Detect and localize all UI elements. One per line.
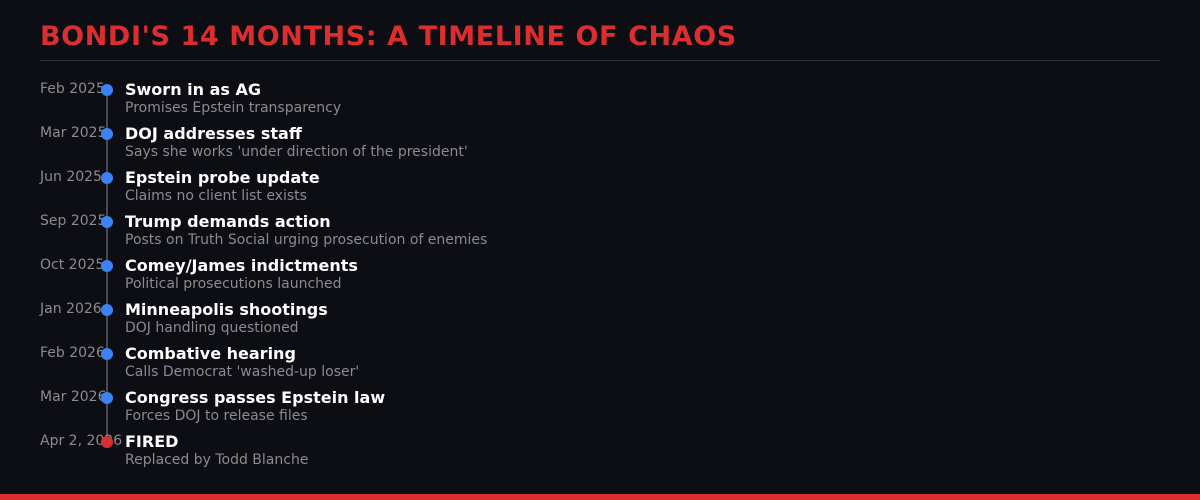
event: Feb 2025: Promises Epstein transparency — [125, 100, 341, 116]
event: Jan 2026 — [39, 300, 328, 336]
event: Mar 2025: Says she works 'under direction of the president' — [125, 144, 468, 160]
event: Feb 2025: Feb 2025 — [40, 81, 105, 97]
event: Mar 2025: DOJ addresses staff — [125, 124, 302, 143]
event: Sep 2025: Sep 2025 — [40, 213, 106, 229]
title: BONDI'S 14 MONTHS: A TIMELINE OF CHAOS — [40, 21, 737, 52]
event: Sep 2025: Posts on Truth Social urging prosecution of enemies — [125, 232, 487, 248]
event: Jan 2026: Jan 2026 — [40, 301, 102, 317]
event: Oct 2025: Political prosecutions launched — [125, 276, 342, 292]
event: Mar 2026: Forces DOJ to release files — [125, 408, 308, 424]
timeline — [39, 80, 487, 468]
event: Mar 2025 — [40, 124, 468, 160]
event: Jan 2026: Minneapolis shootings — [125, 300, 328, 319]
event: Feb 2026: Calls Democrat 'washed-up loser' — [125, 364, 359, 380]
event: Mar 2026: Mar 2026 — [40, 389, 106, 405]
event: Jun 2025: Claims no client list exists — [125, 188, 307, 204]
event: Apr 2, 2026: FIRED — [125, 432, 178, 451]
event: Feb 2025: Sworn in as AG — [125, 80, 261, 99]
event: Feb 2025 — [40, 80, 341, 116]
event: Sep 2025 — [40, 212, 487, 248]
event: Jun 2025: Jun 2025 — [40, 169, 102, 185]
event: Jan 2026: DOJ handling questioned — [125, 320, 299, 336]
event: Feb 2026: Feb 2026 — [40, 345, 105, 361]
event: Apr 2, 2026: Apr 2, 2026 — [40, 433, 122, 449]
event: Apr 2, 2026: Replaced by Todd Blanche — [125, 452, 308, 468]
event: Jun 2025 — [39, 168, 320, 204]
event: Mar 2026 — [40, 388, 385, 424]
event: Feb 2026 — [40, 344, 359, 380]
bottom red bar — [0, 494, 1200, 500]
event: Feb 2026: Combative hearing — [125, 344, 296, 363]
event: Oct 2025 — [40, 256, 358, 292]
event: Mar 2026: Congress passes Epstein law — [125, 388, 385, 407]
event: Oct 2025: Comey/James indictments — [125, 256, 358, 275]
event: Apr 2, 2026 — [40, 432, 308, 468]
event: Sep 2025: Trump demands action — [125, 212, 331, 231]
event: Oct 2025: Oct 2025 — [40, 257, 104, 273]
event: Mar 2025: Mar 2025 — [40, 125, 106, 141]
event: Jun 2025: Epstein probe update — [125, 168, 320, 187]
